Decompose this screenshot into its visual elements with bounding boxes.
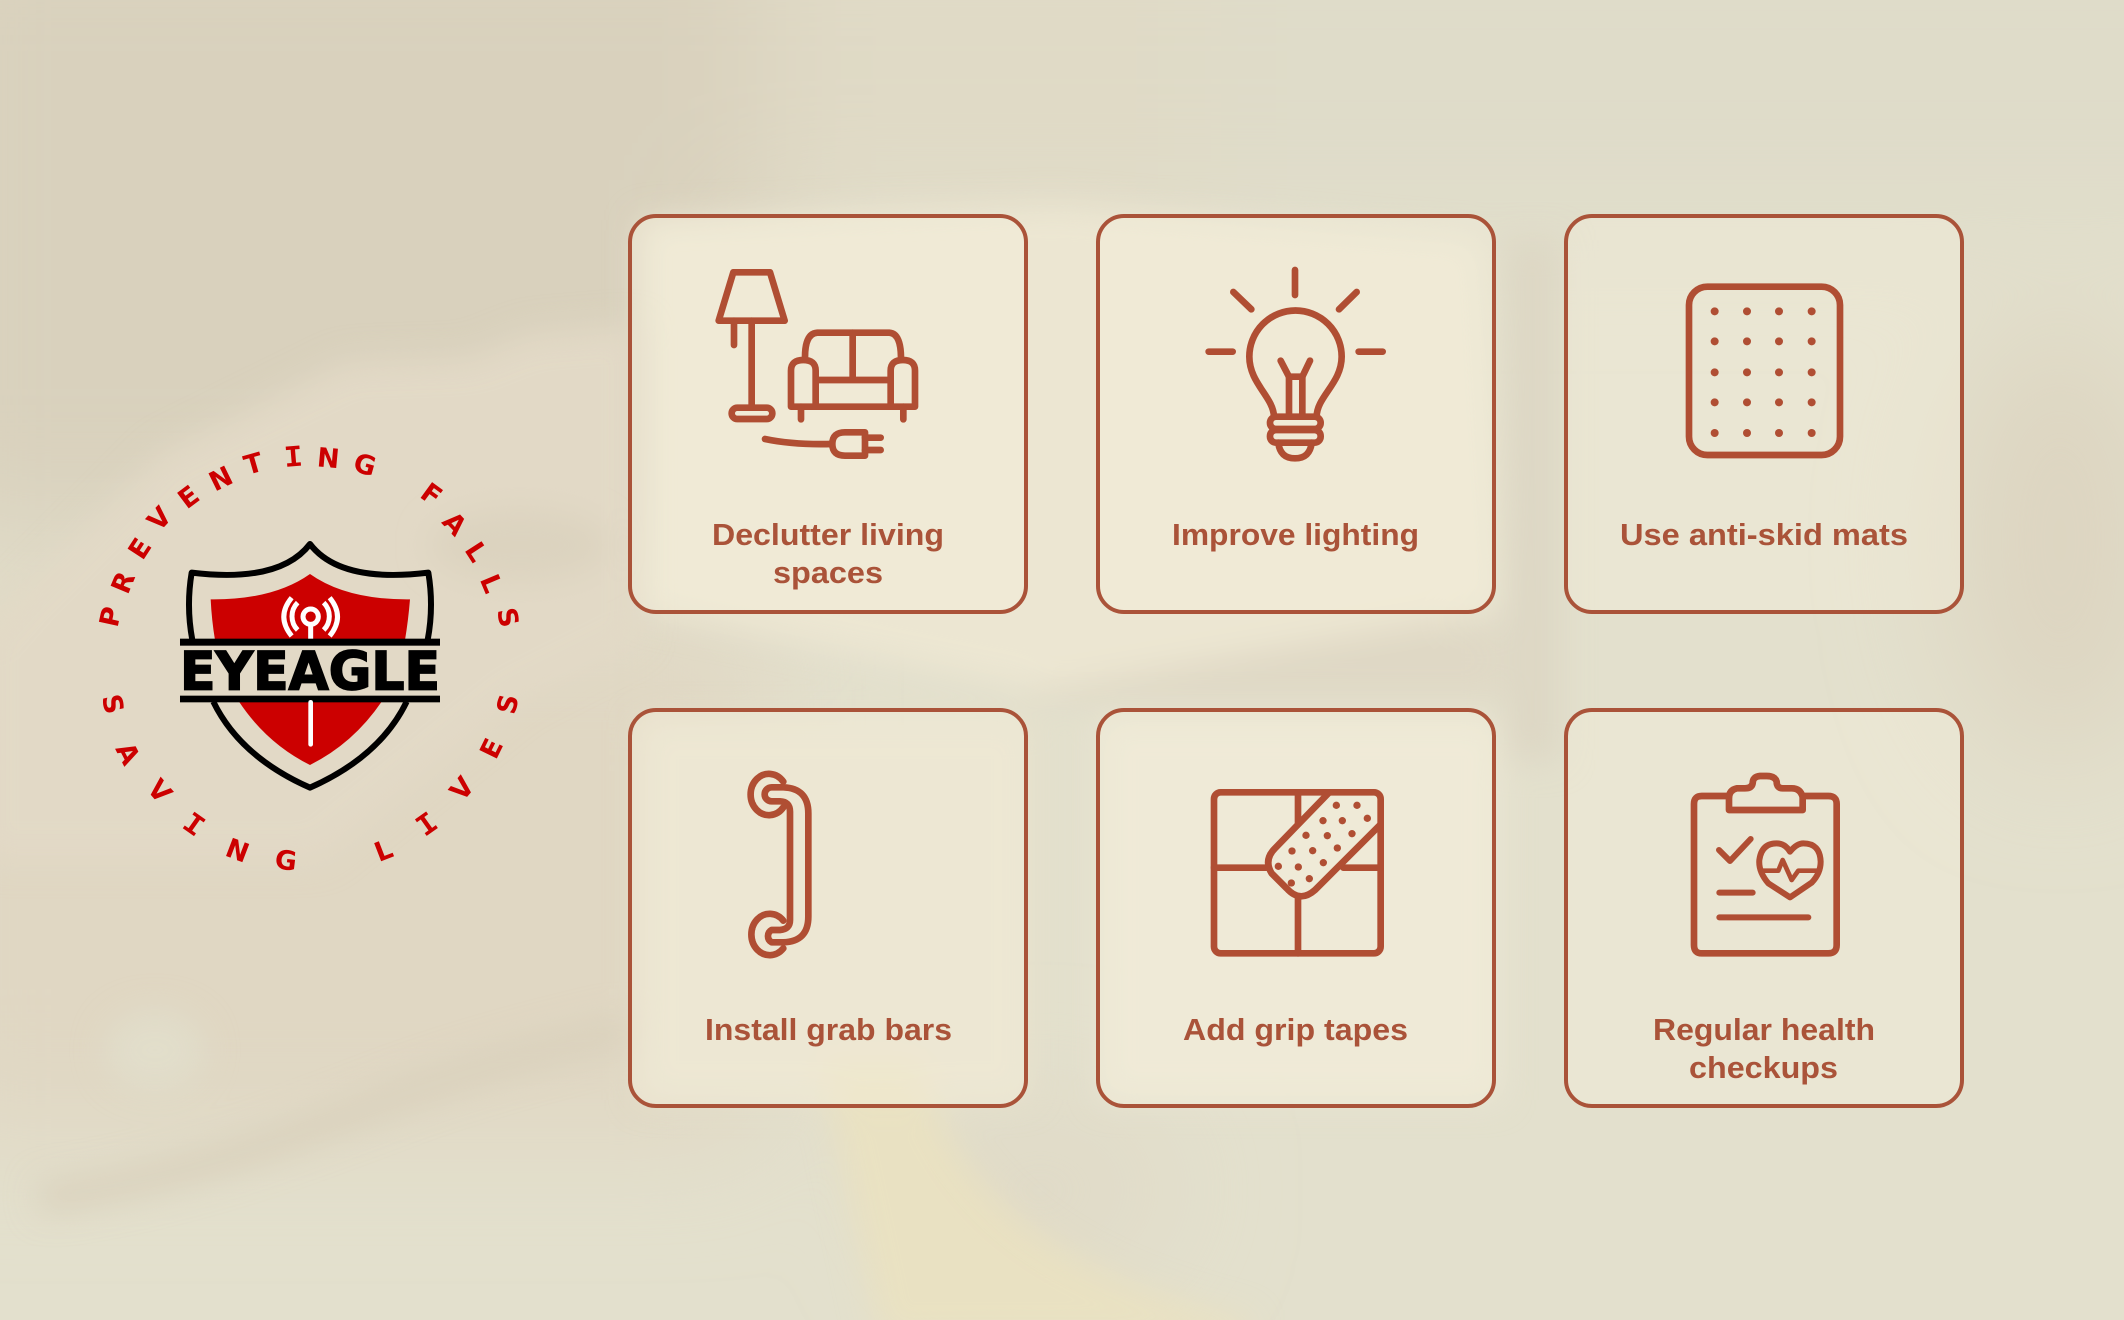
circular text: saving lives: L xyxy=(370,834,397,869)
panel: declutter living spaces xyxy=(630,216,1026,612)
circular text: saving lives: G xyxy=(273,844,299,878)
circular text: preventing falls: A xyxy=(436,506,473,543)
icon: signal antenna xyxy=(284,598,337,639)
label: declutter living spaces: spaces xyxy=(773,555,883,590)
panel: regular health checkups xyxy=(1566,710,1962,1106)
circular text: preventing falls: L xyxy=(458,537,493,568)
icon: grab bar xyxy=(751,774,808,955)
circular text: saving lives: S xyxy=(95,692,129,717)
circular text: preventing falls xyxy=(94,441,524,630)
brand name: EYEAGLE xyxy=(180,641,440,702)
label: install grab bars: Install grab bars xyxy=(705,1012,952,1047)
logo: Eyeagle badge xyxy=(94,441,526,878)
icon: clipboard with heart xyxy=(1694,776,1837,953)
label: use anti-skid mats: Use anti-skid mats xyxy=(1620,517,1908,552)
circular text: preventing falls: N xyxy=(204,461,238,498)
circular text: saving lives: A xyxy=(109,738,146,770)
circular text: saving lives: N xyxy=(221,833,253,870)
circular text: preventing falls: I xyxy=(283,441,304,477)
circular text: preventing falls: R xyxy=(105,567,142,598)
circular text: preventing falls: E xyxy=(122,533,158,565)
circular text: saving lives xyxy=(95,692,526,878)
shield emblem xyxy=(180,544,440,788)
icon: light bulb xyxy=(1209,270,1383,458)
panel: improve lighting xyxy=(1098,216,1494,612)
label: add grip tapes: Add grip tapes xyxy=(1183,1012,1408,1047)
circular text: saving lives: V xyxy=(444,771,481,807)
label: improve lighting: Improve lighting xyxy=(1172,517,1419,552)
icon: lamp, sofa and plug xyxy=(719,272,915,456)
circular text: saving lives: I xyxy=(175,806,210,846)
circular text: preventing falls: E xyxy=(172,480,206,515)
circular text: saving lives: E xyxy=(474,734,510,764)
label: declutter living spaces: Declutter living xyxy=(712,517,944,552)
panel: add grip tapes xyxy=(1098,710,1494,1106)
circular text: preventing falls: F xyxy=(414,477,447,513)
circular text: saving lives: S xyxy=(491,692,526,717)
circular text: saving lives: I xyxy=(410,806,446,845)
label: regular health checkups xyxy=(1653,1012,1875,1085)
circular text: preventing falls: V xyxy=(141,501,178,537)
circular text: preventing falls: G xyxy=(350,448,379,483)
label: regular health checkups: Regular health xyxy=(1653,1012,1875,1047)
panel: install grab bars xyxy=(630,710,1026,1106)
icon: anti-skid mat xyxy=(1689,287,1840,455)
label: declutter living spaces xyxy=(712,517,944,590)
circular text: preventing falls: N xyxy=(316,442,341,475)
circular text: preventing falls: L xyxy=(473,570,508,598)
circular text: preventing falls: T xyxy=(241,447,267,482)
circular text: saving lives: V xyxy=(141,773,178,810)
circular text: preventing falls: S xyxy=(490,605,524,630)
circular text: preventing falls: P xyxy=(94,604,128,630)
panel: use anti-skid mats xyxy=(1566,216,1962,612)
label: regular health checkups: checkups xyxy=(1689,1050,1838,1085)
icon: floor tiles with grip tape xyxy=(1214,792,1381,953)
